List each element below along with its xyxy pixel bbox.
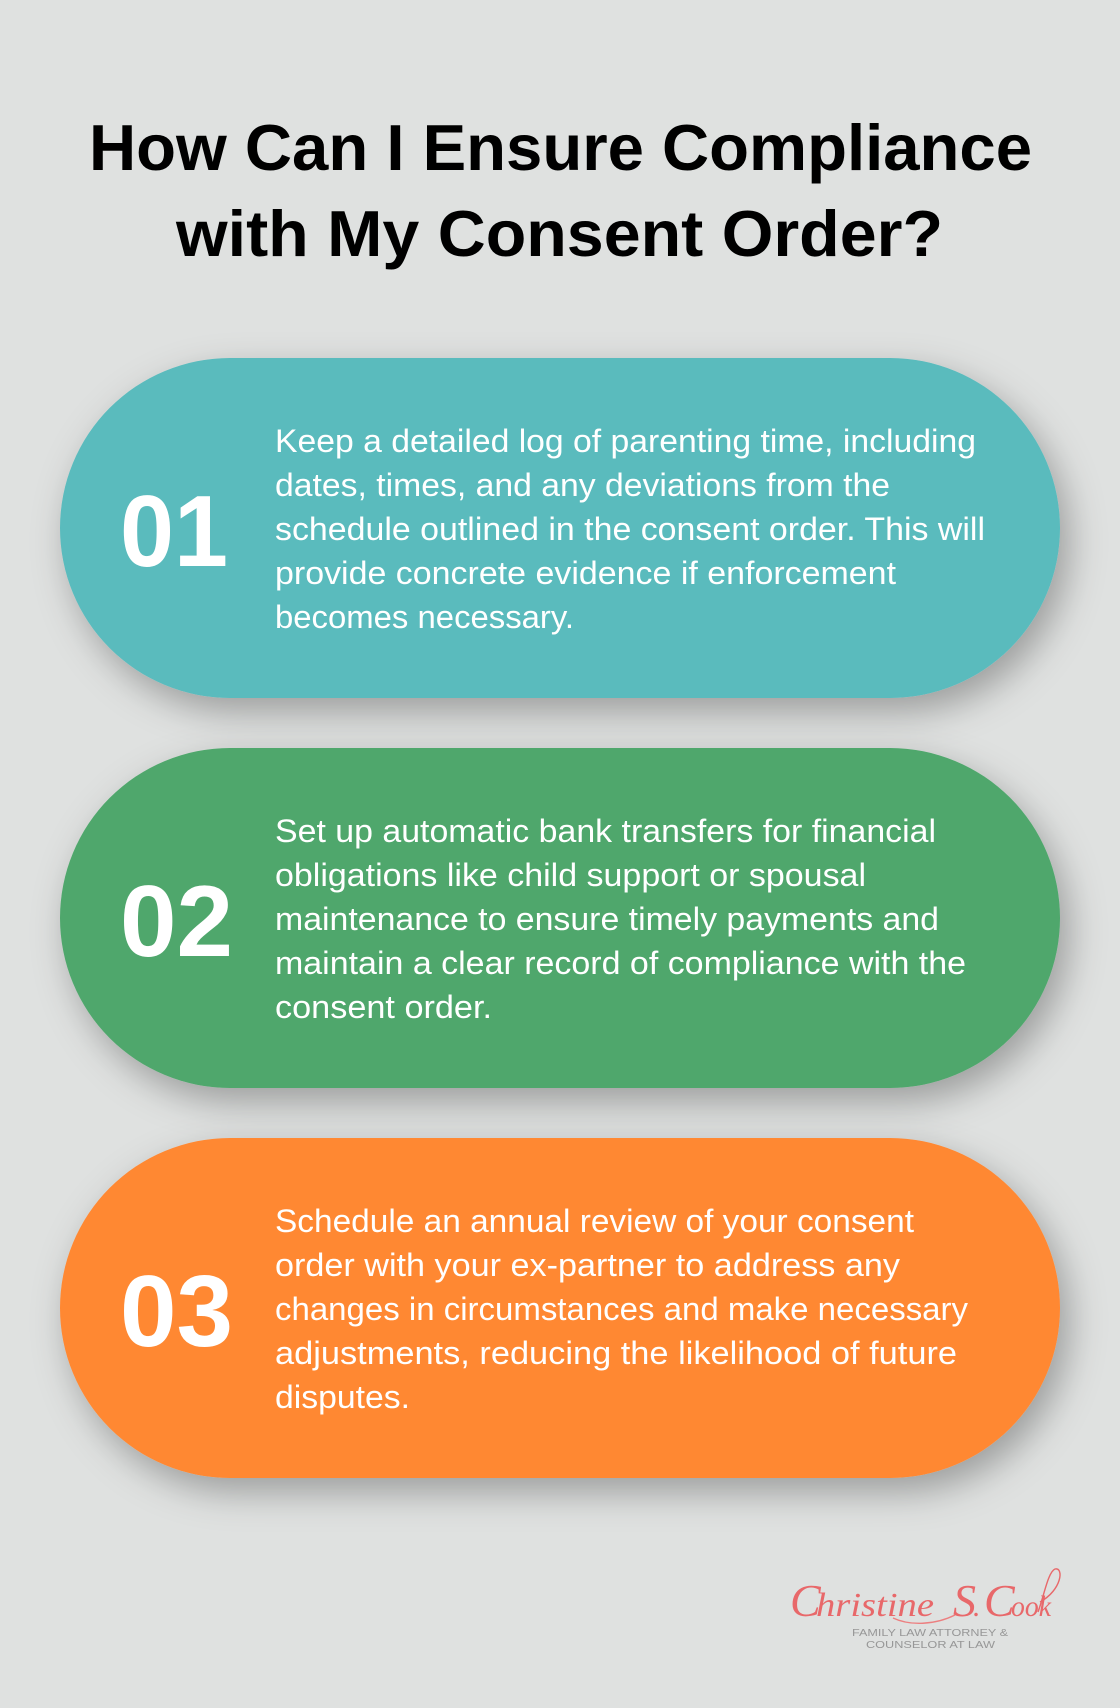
step 03 text: [275, 1203, 968, 1415]
step 02 text: Set up automatic bank transfers for financial: [275, 813, 936, 849]
step 01 text: [275, 423, 985, 635]
step 02 text: maintenance to ensure timely payments and: [275, 901, 939, 937]
step 03 text: adjustments, reducing the likelihood of future: [275, 1335, 957, 1371]
step number 01: 01: [120, 476, 228, 588]
logo: Christine S. Cook: C: [790, 1575, 822, 1626]
step 01 text: schedule outlined in the consent order. This will: [275, 511, 985, 547]
logo: Christine S. Cook: [790, 1569, 1060, 1651]
step 02 text: consent order.: [275, 989, 492, 1025]
panel: step 02: [60, 748, 1060, 1088]
logo: Christine S. Cook: S: [953, 1575, 976, 1626]
title: with My Consent Order?: [175, 197, 943, 270]
panel: step 01: [60, 358, 1060, 698]
step 01 text: Keep a detailed log of parenting time, including: [275, 423, 976, 459]
logo: Christine S. Cook: COUNSELOR AT LAW: [866, 1639, 995, 1651]
step number 02: 02: [120, 866, 233, 978]
title: How Can I Ensure Compliance: [89, 111, 1032, 184]
logo: Christine S. Cook: C: [984, 1575, 1016, 1626]
step 03 text: disputes.: [275, 1379, 410, 1415]
step 03 text: Schedule an annual review of your consent: [275, 1203, 914, 1239]
logo: Christine S. Cook: hristine: [816, 1587, 934, 1624]
step 03 text: order with your ex-partner to address any: [275, 1247, 900, 1283]
logo: Christine S. Cook: FAMILY LAW ATTORNEY &: [852, 1627, 1008, 1639]
step number 03: 03: [120, 1256, 233, 1368]
logo: Christine S. Cook: ook: [1011, 1590, 1052, 1623]
step 01 text: provide concrete evidence if enforcement: [275, 555, 896, 591]
step 01 text: becomes necessary.: [275, 599, 574, 635]
step 02 text: [275, 813, 966, 1025]
step 01 text: dates, times, and any deviations from the: [275, 467, 890, 503]
step 02 text: obligations like child support or spousal: [275, 857, 866, 893]
title: [89, 111, 1032, 270]
panel: step 03: [60, 1138, 1060, 1478]
step 03 text: changes in circumstances and make necessary: [275, 1291, 968, 1327]
step 02 text: maintain a clear record of compliance with the: [275, 945, 966, 981]
logo: Christine S. Cook: .: [973, 1590, 980, 1623]
